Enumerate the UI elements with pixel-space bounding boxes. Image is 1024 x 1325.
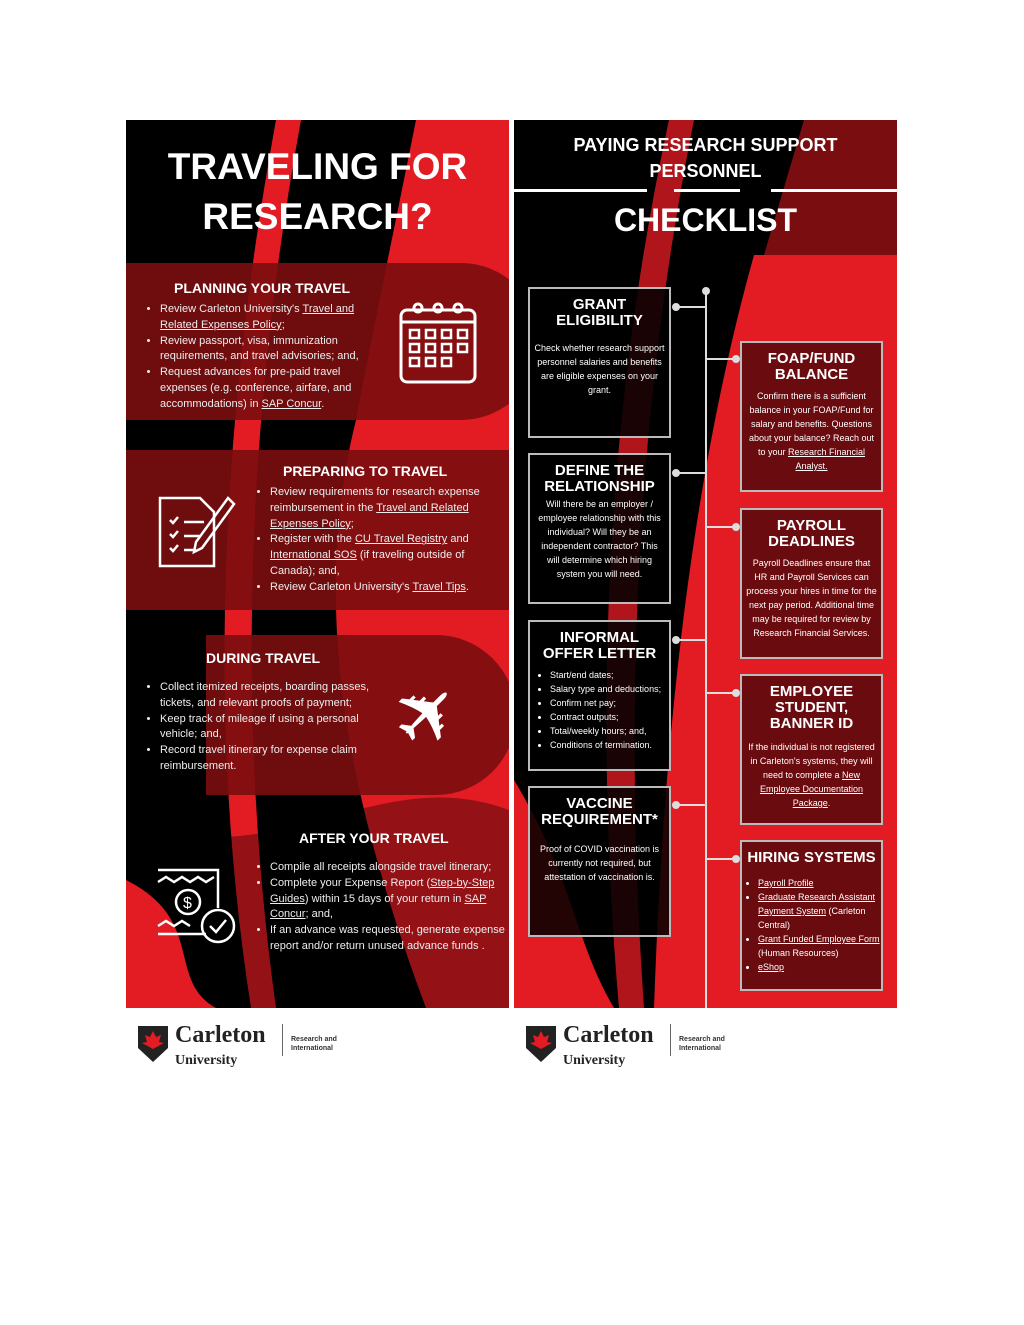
box: payroll deadlines: DEADLINES	[768, 533, 855, 550]
section: after: Complete your Expense Report (Step-by-Step Guides) within 15 days of your return in SAP Concur; and,	[270, 877, 494, 920]
box: vaccine requirement: Proof of COVID vaccination is currently not required, but attestation of vaccination is.	[540, 844, 659, 882]
box: informal offer letter: Total/weekly hours; and,	[550, 726, 647, 736]
icon: calendar	[400, 302, 476, 384]
box: foap/fund balance	[740, 341, 883, 492]
box: payroll deadlines: PAYROLL	[777, 517, 846, 534]
title: checklist: CHECKLIST	[614, 202, 797, 238]
box: hiring systems: Payroll Profile	[758, 878, 814, 888]
box: foap/fund balance: Confirm there is a sufficient balance in your FOAP/Fund for salary and benefits. Questions about your balance? Reach out to your Research Financial Analyst.	[749, 391, 874, 471]
box: define the relationship: DEFINE THE	[555, 462, 644, 479]
section: during: DURING TRAVEL	[206, 650, 320, 666]
box: grant eligibility: ELIGIBILITY	[556, 312, 643, 329]
title: TRAVELING FOR	[168, 146, 467, 187]
box: employee student banner id: If the individual is not registered in Carleton's systems, they will need to complete a New Employee Documentation Package.	[748, 742, 875, 808]
panel: paying research support personnel checklist	[514, 120, 897, 1008]
box: grant eligibility: GRANT	[573, 296, 626, 313]
box: foap/fund balance: FOAP/FUND	[768, 350, 855, 367]
box: vaccine requirement: REQUIREMENT*	[541, 811, 658, 828]
box: hiring systems: Grant Funded Employee Form (Human Resources)	[758, 934, 880, 958]
footer: right logo	[514, 1008, 897, 1078]
box: grant eligibility: Check whether research support personnel salaries and benefits are eligible expenses on your grant.	[534, 343, 665, 395]
footer: right logo: International	[679, 1045, 721, 1052]
section: planning: Review Carleton University's Travel and Related Expenses Policy;	[160, 303, 354, 331]
box: employee student banner id: BANNER ID	[770, 715, 853, 732]
section: during: Collect itemized receipts, boarding passes, tickets, and relevant proofs of payment;	[160, 681, 369, 709]
box: hiring systems	[740, 840, 883, 991]
box: vaccine requirement	[528, 786, 671, 937]
box: foap/fund balance: BALANCE	[775, 366, 848, 383]
section: after: If an advance was requested, generate expense report and/or return unused advance funds .	[270, 924, 505, 952]
title	[168, 146, 467, 237]
icon: airplane: ✈	[372, 659, 482, 770]
box: informal offer letter: Conditions of termination.	[550, 740, 652, 750]
section: preparing: Review Carleton University's Travel Tips.	[270, 581, 469, 593]
box: employee student banner id: EMPLOYEE	[770, 683, 853, 700]
section: during: Record travel itinerary for expense claim reimbursement.	[160, 744, 357, 772]
panel: traveling for research	[126, 120, 509, 1008]
section: planning: Review passport, visa, immunization requirements, and travel advisories; and,	[160, 335, 359, 362]
timeline connector	[672, 287, 740, 1008]
heading: PAYING RESEARCH SUPPORT	[573, 135, 838, 155]
footer: left logo: International	[291, 1045, 333, 1052]
heading: PERSONNEL	[649, 161, 762, 181]
section: during: Keep track of mileage if using a personal vehicle; and,	[160, 713, 359, 740]
box: grant eligibility	[528, 287, 671, 438]
box: hiring systems: HIRING SYSTEMS	[747, 849, 876, 866]
section: planning: Request advances for pre-paid travel expenses (e.g. conference, airfare, and accommodations) in SAP Concur.	[160, 366, 351, 410]
section: during	[147, 650, 369, 772]
box: informal offer letter: INFORMAL	[560, 629, 639, 646]
footer: left logo: Research and	[291, 1036, 337, 1043]
section: preparing: PREPARING TO TRAVEL	[283, 463, 447, 479]
footer: left logo: Carleton	[175, 1022, 266, 1048]
title: RESEARCH?	[202, 196, 433, 237]
section: after: AFTER YOUR TRAVEL	[299, 830, 449, 846]
icon: receipt with check: $	[183, 895, 192, 912]
heading	[573, 135, 838, 181]
box: hiring systems: Graduate Research Assistant Payment System (Carleton Central)	[758, 892, 875, 930]
box: define the relationship	[528, 453, 671, 604]
box: hiring systems: eShop	[758, 962, 784, 972]
section: after	[257, 830, 505, 952]
box: informal offer letter	[528, 620, 671, 771]
footer: right logo: Research and	[679, 1036, 725, 1043]
section: planning	[147, 280, 359, 410]
footer: left logo: University	[175, 1053, 237, 1068]
section: planning: PLANNING YOUR TRAVEL	[174, 280, 350, 296]
box: informal offer letter: Confirm net pay;	[550, 698, 616, 708]
box: employee student banner id: STUDENT,	[775, 699, 848, 716]
box: informal offer letter: Contract outputs;	[550, 712, 619, 722]
section: preparing: Register with the CU Travel Registry and International SOS (if traveling outside of Canada); and,	[270, 533, 469, 577]
box: informal offer letter: Salary type and deductions;	[550, 684, 661, 694]
box: payroll deadlines	[740, 508, 883, 659]
box: define the relationship: Will there be an employer / employee relationship with this individual? Will they be an independent contractor? This will determine which hiring system you will need.	[538, 499, 661, 579]
icon: checklist with pen	[158, 496, 236, 568]
box: employee student banner id	[740, 674, 883, 825]
box: define the relationship: RELATIONSHIP	[544, 478, 655, 495]
section: after: Compile all receipts alongside travel itinerary;	[270, 861, 491, 873]
section: preparing: Review requirements for research expense reimbursement in the Travel and Related Expenses Policy;	[270, 486, 480, 530]
icon: receipt with check	[157, 868, 236, 944]
footer: left logo	[126, 1008, 509, 1078]
footer: right logo: Carleton	[563, 1022, 654, 1048]
section: preparing	[257, 463, 480, 593]
box: informal offer letter: Start/end dates;	[550, 670, 614, 680]
box: payroll deadlines: Payroll Deadlines ensure that HR and Payroll Services can process your hires in time for the next pay period. Additional time may be required for review by Research Financial Services.	[746, 558, 877, 638]
footer: right logo: University	[563, 1053, 625, 1068]
box: informal offer letter: OFFER LETTER	[543, 645, 656, 662]
box: vaccine requirement: VACCINE	[566, 795, 633, 812]
